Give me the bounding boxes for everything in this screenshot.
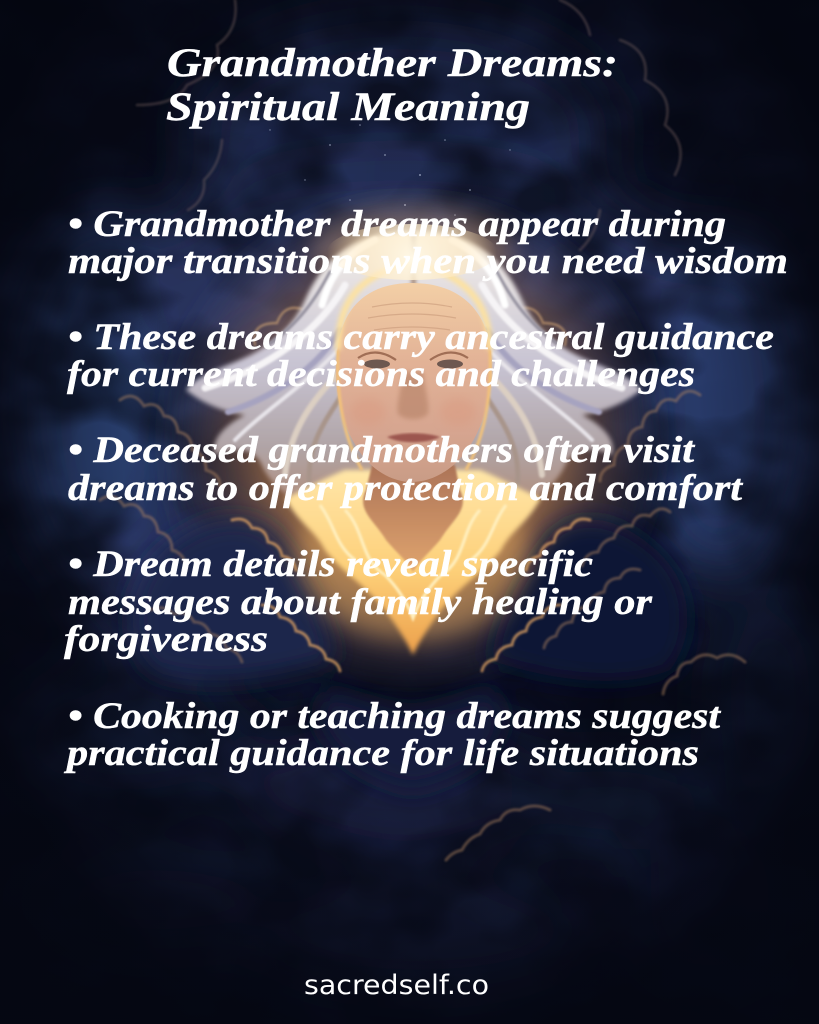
bullet 5: • Cooking or teaching dreams suggest xyxy=(68,696,722,737)
hair, left wing xyxy=(186,232,412,503)
halo above the head xyxy=(312,205,512,295)
bullet 1: • Grandmother dreams appear during xyxy=(68,204,726,245)
title: Spiritual Meaning xyxy=(166,84,530,129)
hair, right wing xyxy=(415,232,641,503)
bullet 2: • These dreams carry ancestral guidance xyxy=(68,317,774,358)
neck xyxy=(363,465,463,572)
bullet 4: messages about family healing or xyxy=(68,582,653,623)
nose xyxy=(397,372,429,419)
bullet 1: major transitions when you need wisdom xyxy=(68,241,788,282)
title: Grandmother Dreams: xyxy=(167,40,618,85)
figure: glowing grandmother portrait xyxy=(186,205,641,655)
bullet list xyxy=(64,204,788,774)
stars xyxy=(269,124,511,216)
central glow xyxy=(150,190,674,690)
bullet 2 xyxy=(67,317,774,395)
bullet 1 xyxy=(68,204,788,282)
lower darkening xyxy=(0,560,819,1024)
face xyxy=(336,283,492,482)
title xyxy=(166,40,618,129)
collar flame lines xyxy=(320,505,506,618)
bullet 2: for current decisions and challenges xyxy=(67,354,695,395)
bullet 3: • Deceased grandmothers often visit xyxy=(68,430,696,471)
bullet 4: • Dream details reveal specific xyxy=(68,544,593,585)
cloud rim lines xyxy=(100,0,745,860)
bullet 4 xyxy=(64,544,653,660)
cheeks xyxy=(350,398,386,426)
glowing collar xyxy=(285,470,541,655)
footer: website: sacredself.co xyxy=(304,970,489,1001)
forehead wrinkles xyxy=(368,303,456,330)
bullet 5 xyxy=(64,696,722,774)
mouth xyxy=(387,433,440,442)
brows and eyes xyxy=(358,352,468,368)
bullet 5: practical guidance for life situations xyxy=(64,733,699,774)
bullet 4: forgiveness xyxy=(64,619,268,660)
bullet 3: dreams to offer protection and comfort xyxy=(68,468,744,509)
dark clouds framing the figure xyxy=(133,519,687,790)
bullet 3 xyxy=(68,430,744,509)
hairline glow xyxy=(338,262,490,350)
glow behind the collar xyxy=(298,470,528,640)
